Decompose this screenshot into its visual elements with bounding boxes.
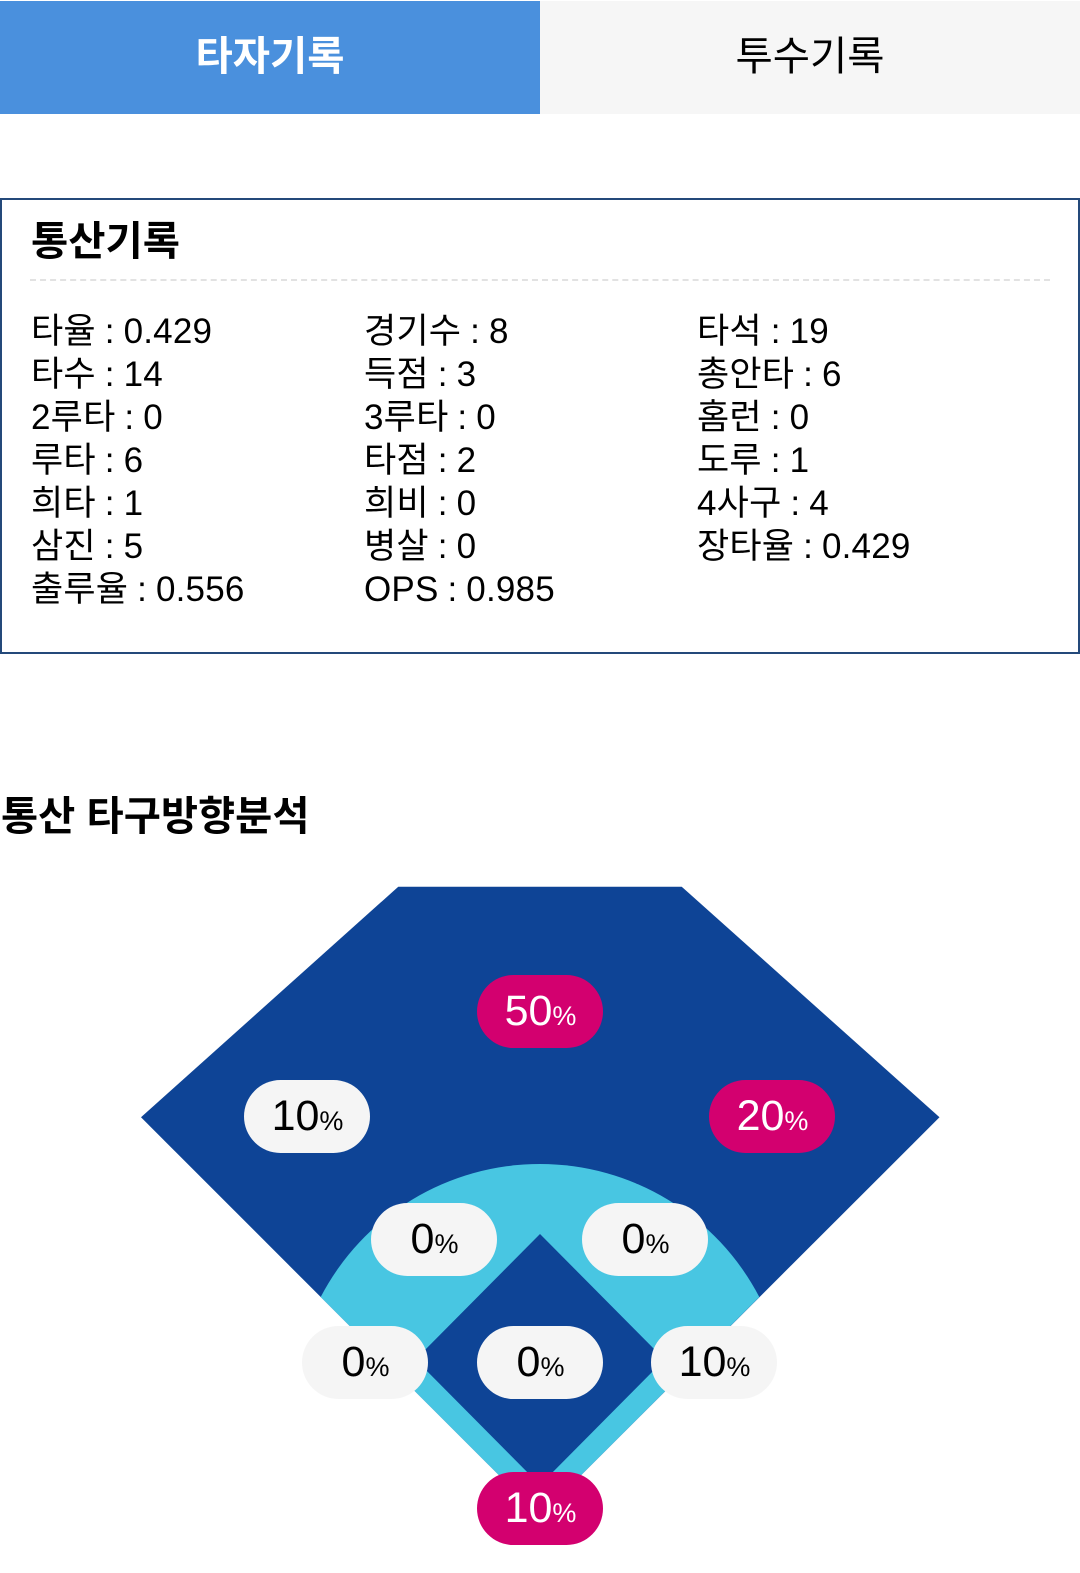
pill: left field 10%: 10% xyxy=(272,1092,343,1140)
pill: right infield 0% xyxy=(582,1203,708,1276)
tab: pitcher records xyxy=(540,1,1080,114)
stats column 1: 타율 : 0.429 xyxy=(31,312,212,351)
pill: left infield 0% xyxy=(371,1203,497,1276)
pill: right field 20% xyxy=(709,1080,835,1153)
pill: first base 10%: 10% xyxy=(679,1338,750,1386)
stats column 2: 경기수 : 8 xyxy=(364,312,509,351)
infield arc xyxy=(321,1164,759,1516)
stats column 2: 병살 : 0 xyxy=(364,527,476,566)
stats column 1: 출루율 : 0.556 xyxy=(31,570,245,609)
stats column 3: 도루 : 1 xyxy=(697,441,809,480)
tab: pitcher records: 투수기록 xyxy=(735,33,885,79)
stats column 2: 타점 : 2 xyxy=(364,441,476,480)
heading: career records: 통산기록 xyxy=(31,218,180,264)
pill: home 10% xyxy=(477,1472,603,1545)
pill: center field 50%: 50% xyxy=(505,987,576,1035)
pill: left infield 0%: 0% xyxy=(411,1215,458,1263)
pill: right field 20%: 20% xyxy=(737,1092,808,1140)
outfield xyxy=(141,887,940,1516)
stats column 2: OPS : 0.985 xyxy=(364,570,555,609)
infield diamond xyxy=(416,1234,664,1485)
heading: career batted ball direction analysis: 통산 타구방향분석 xyxy=(1,793,310,839)
pill: third base 0% xyxy=(302,1326,428,1399)
stats column 2: 득점 : 3 xyxy=(364,355,476,394)
stats column 3: 총안타 : 6 xyxy=(697,355,842,394)
stats column 1: 2루타 : 0 xyxy=(31,398,163,437)
stats column 2 xyxy=(364,312,555,609)
stats column 1: 타수 : 14 xyxy=(31,355,163,394)
stats column 3: 4사구 : 4 xyxy=(697,484,829,523)
tab: batter records: 타자기록 xyxy=(195,33,345,79)
stats column 1: 삼진 : 5 xyxy=(31,527,143,566)
pill: left field 10% xyxy=(244,1080,370,1153)
stats column 3 xyxy=(697,312,911,566)
stats column 3: 타석 : 19 xyxy=(697,312,829,351)
stats column 2: 3루타 : 0 xyxy=(364,398,496,437)
pill: mound 0%: 0% xyxy=(517,1338,564,1386)
panel: career records xyxy=(0,198,1080,654)
pill: third base 0%: 0% xyxy=(342,1338,389,1386)
pill: first base 10% xyxy=(651,1326,777,1399)
pill: mound 0% xyxy=(477,1326,603,1399)
stats column 1: 희타 : 1 xyxy=(31,484,143,523)
pill: center field 50% xyxy=(477,975,603,1048)
pill: right infield 0%: 0% xyxy=(622,1215,669,1263)
stats column 3: 장타율 : 0.429 xyxy=(697,527,911,566)
stats column 1 xyxy=(31,312,245,609)
stats column 3: 홈런 : 0 xyxy=(697,398,809,437)
pill: home 10%: 10% xyxy=(505,1484,576,1532)
stats column 1: 루타 : 6 xyxy=(31,441,143,480)
stats column 2: 희비 : 0 xyxy=(364,484,476,523)
tab: batter records xyxy=(0,1,540,114)
